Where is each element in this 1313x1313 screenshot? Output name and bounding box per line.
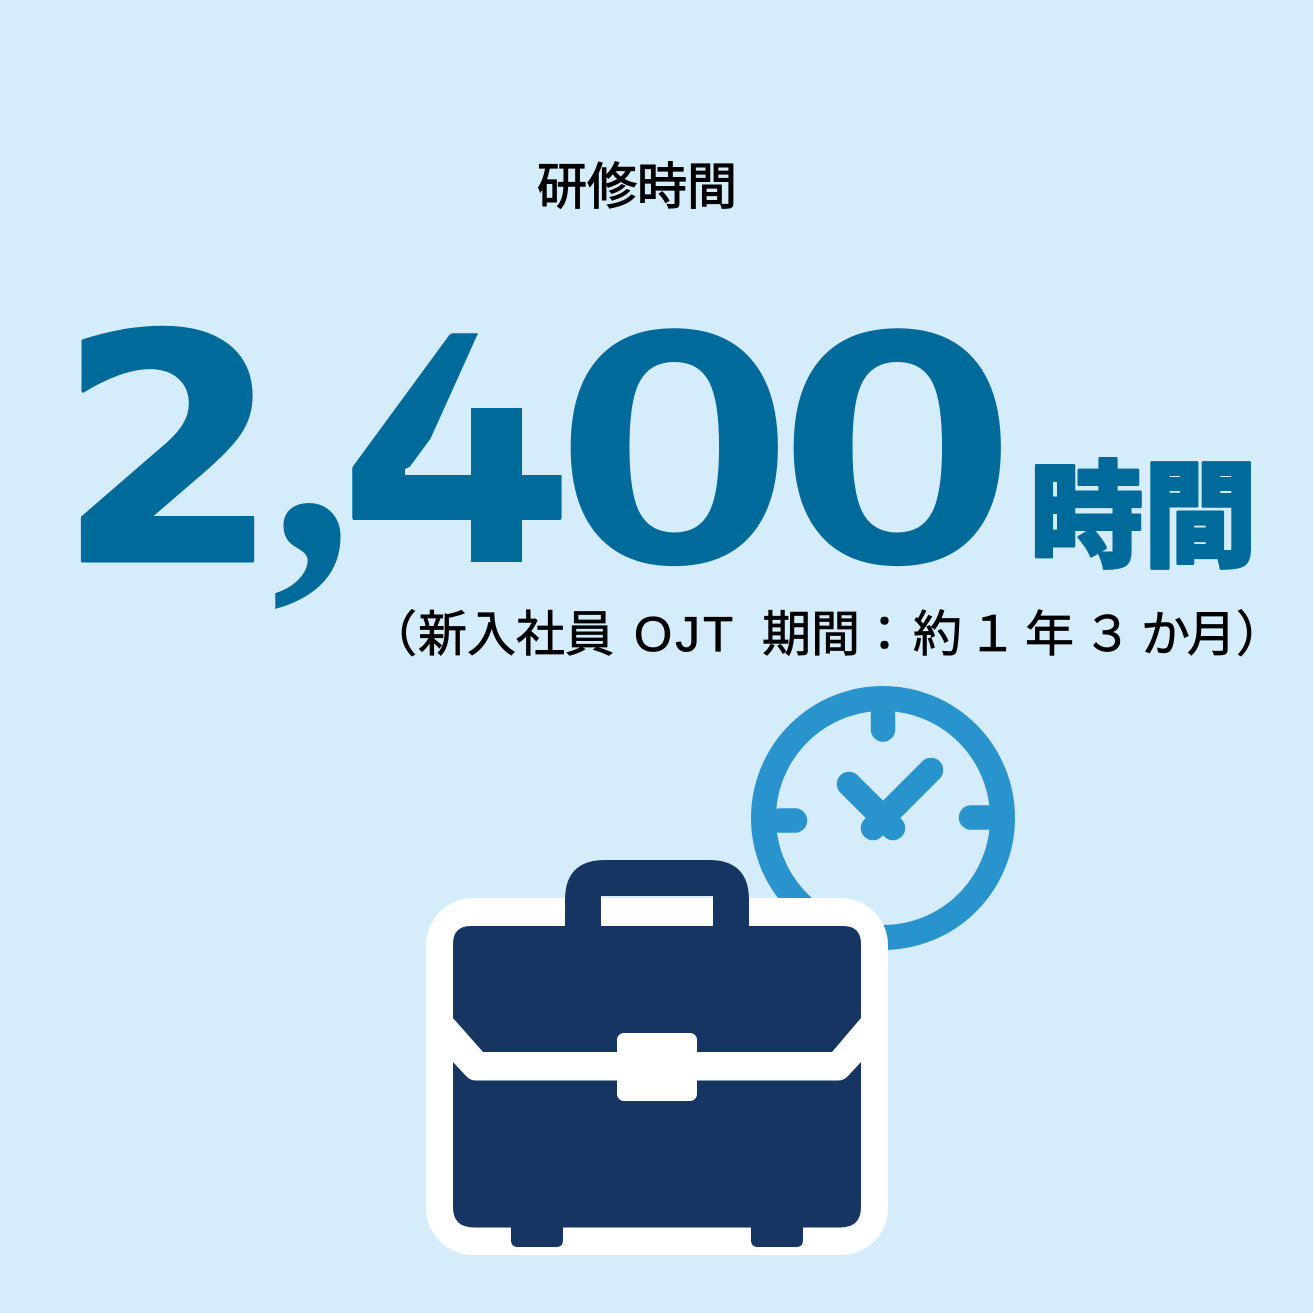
big number: 2 <box>57 270 281 636</box>
big number <box>57 243 1023 642</box>
note: 月 <box>1187 608 1236 662</box>
note: OJT <box>634 608 733 662</box>
note: 約 <box>913 608 962 662</box>
note: 新入社員 <box>418 608 614 662</box>
note: （ <box>368 608 417 662</box>
big number: 4 <box>343 279 571 629</box>
note: ３ <box>1083 608 1132 662</box>
big number: , <box>271 243 353 631</box>
note <box>368 608 1285 662</box>
note: ： <box>860 608 909 662</box>
unit: 時間 <box>1030 454 1257 582</box>
icon: briefcase <box>426 860 888 1255</box>
icon: clock <box>764 698 1002 938</box>
note: 年 <box>1025 608 1074 662</box>
note: ） <box>1236 608 1285 662</box>
note: １ <box>968 608 1017 662</box>
note: 期間 <box>762 608 860 662</box>
big number: 0 <box>772 264 1023 642</box>
title: 研修時間 <box>537 159 737 215</box>
note: か <box>1141 608 1190 662</box>
big number: 0 <box>549 264 800 642</box>
